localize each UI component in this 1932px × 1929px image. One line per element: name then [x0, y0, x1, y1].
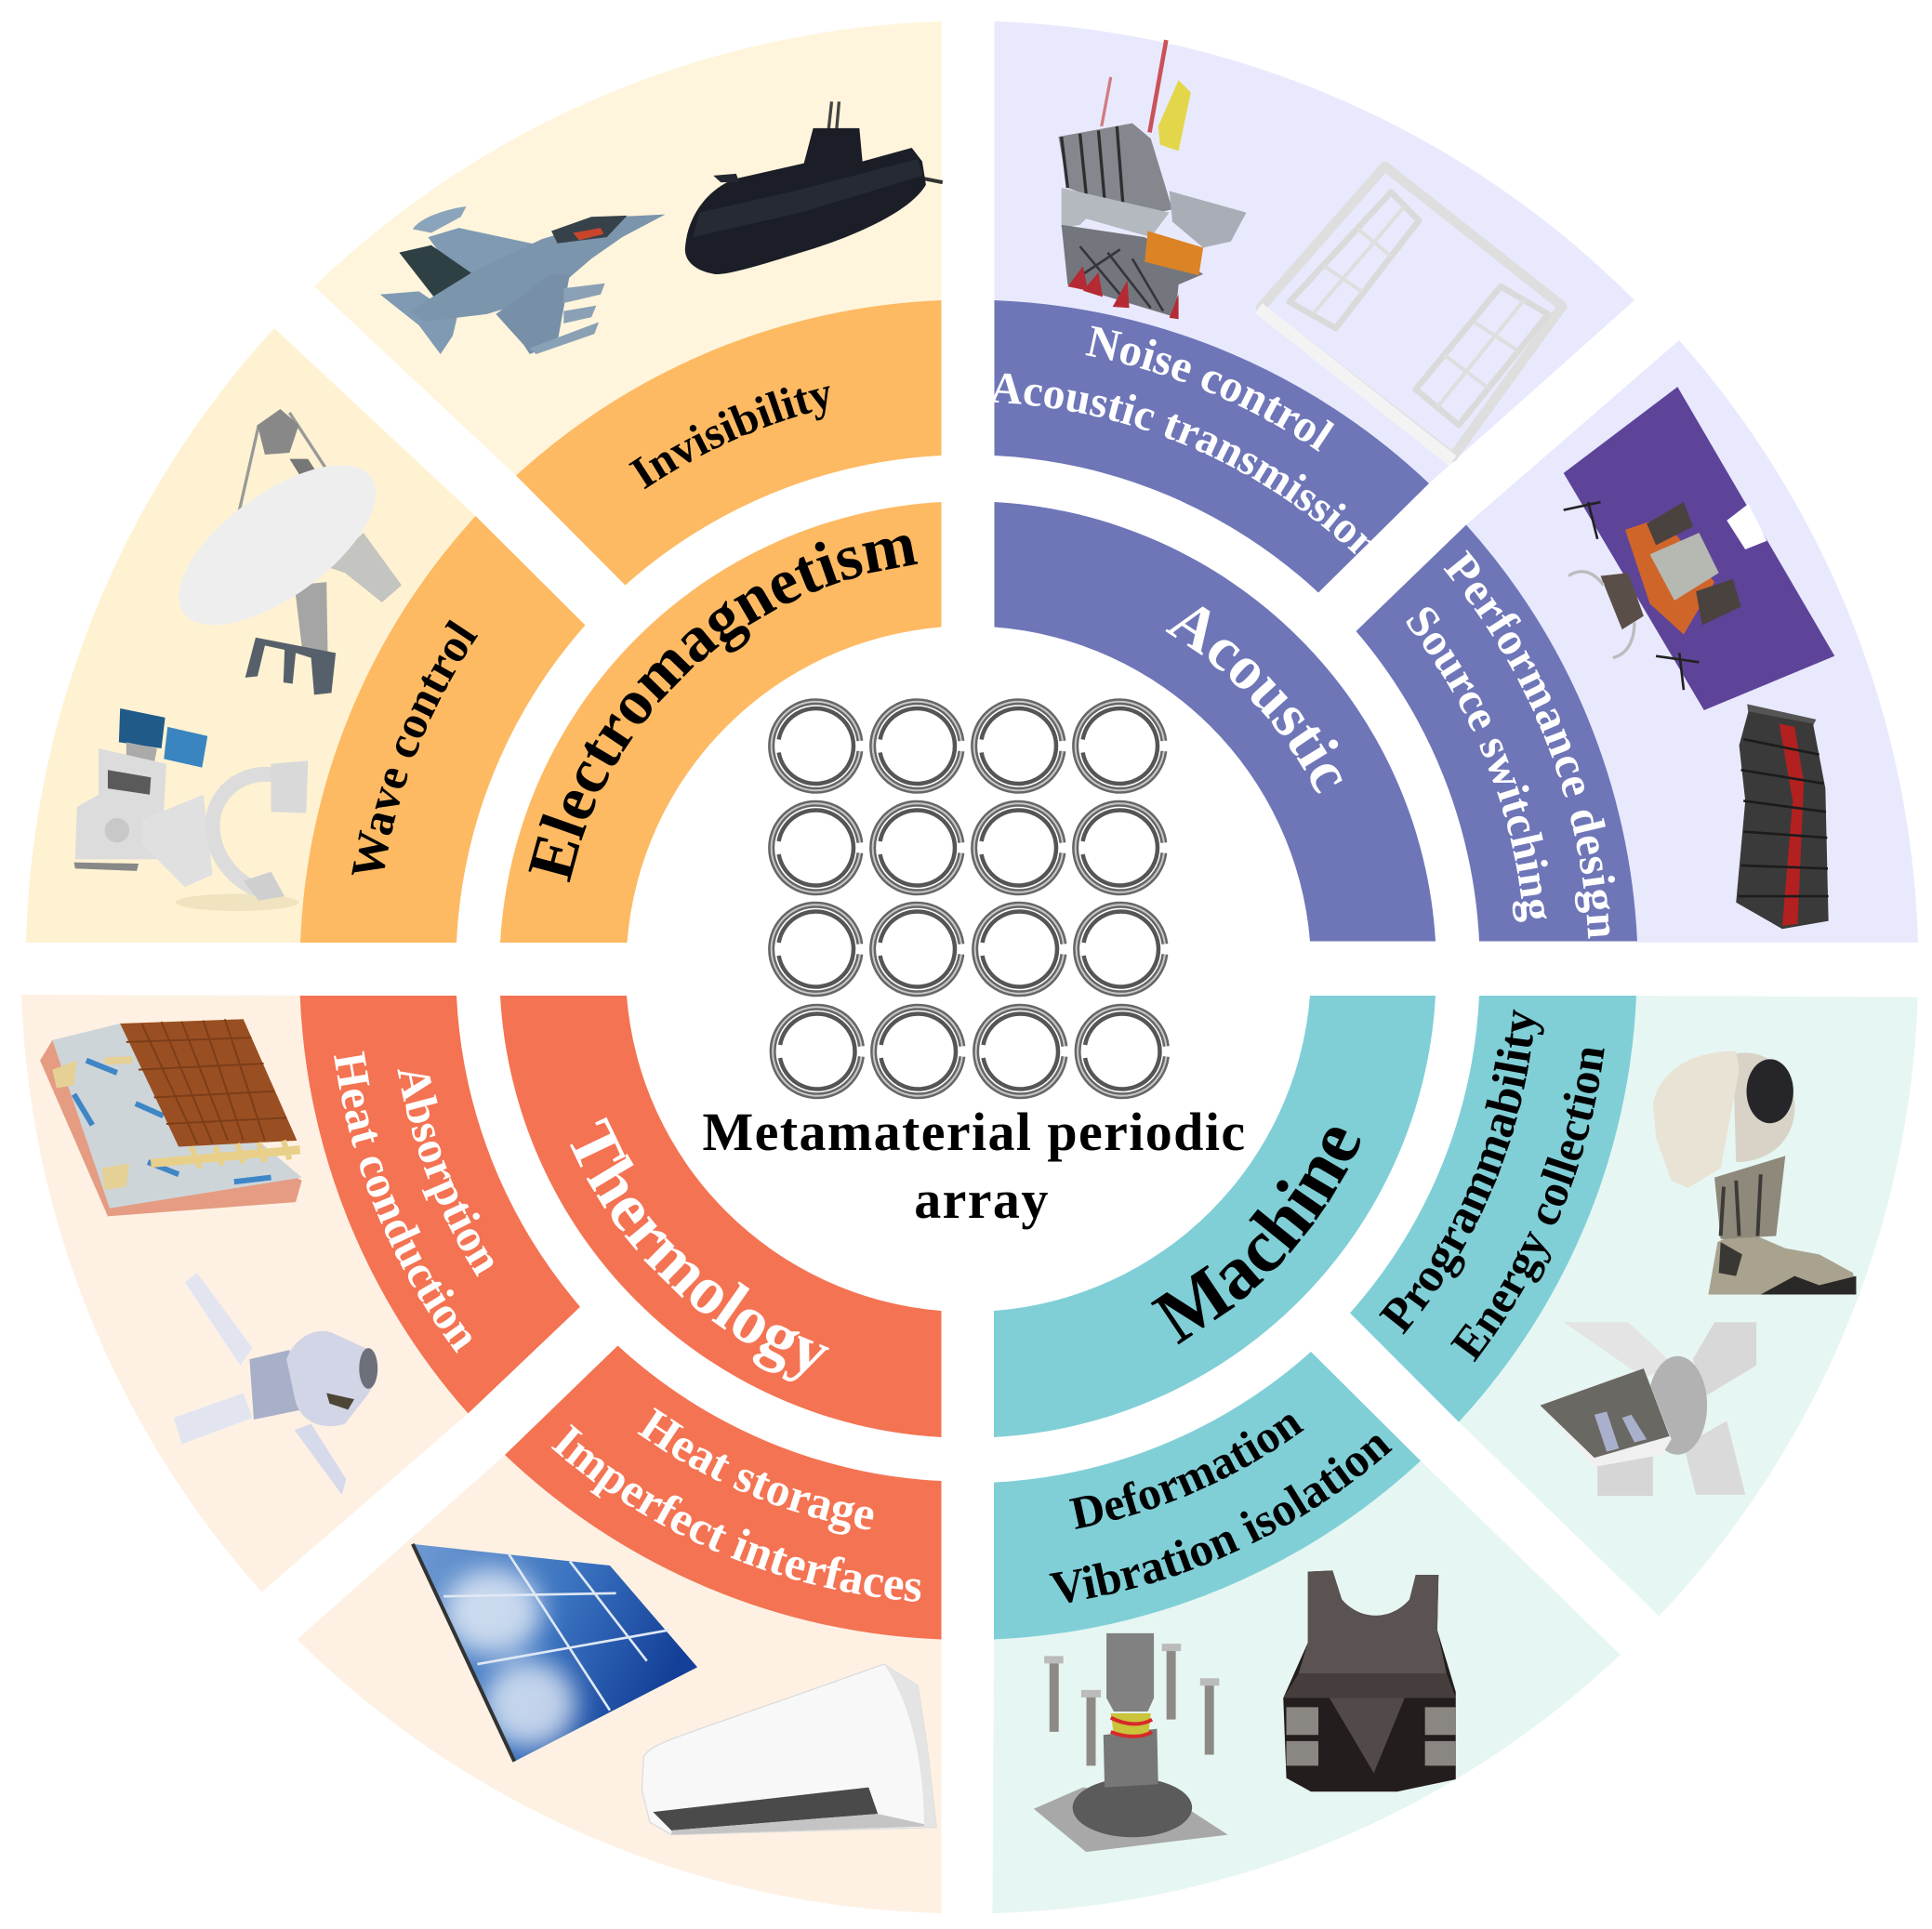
label: Deformation: Deformation — [1069, 1415, 1304, 1529]
label: Energy collection: Energy collection — [1450, 1049, 1605, 1363]
heading: Electromagnetism: Electromagnetism — [528, 535, 919, 883]
icon: C-arm medical scanner — [74, 708, 308, 911]
caption: Metamaterial periodic array: array — [914, 1169, 1050, 1230]
band: machine — [994, 996, 1436, 1437]
label: Acoustic transmission: Acoustic transmission — [995, 374, 1370, 554]
band: programmability — [1350, 996, 1636, 1422]
heading: Machine: Machine — [1151, 1128, 1360, 1344]
icon: fighter jet — [380, 206, 666, 354]
band: electromagnetism — [500, 502, 941, 943]
sector: noise control background — [995, 21, 1634, 483]
icon: offshore platform — [1058, 40, 1246, 319]
panel: electromagnetism quadrant — [26, 21, 943, 943]
sector: performance design background — [1466, 340, 1918, 943]
sector: wave control background — [26, 328, 476, 943]
band: performance design — [1356, 524, 1637, 941]
sector: invisibility background — [314, 21, 941, 476]
icon: humanoid robot — [1653, 1051, 1856, 1294]
label: Absorption: Absorption — [397, 1069, 493, 1277]
label: Performance design: Performance design — [1443, 549, 1615, 939]
sector: absorption background — [21, 995, 469, 1592]
sector: deformation background — [993, 1460, 1621, 1913]
label: Heat storage: Heat storage — [638, 1407, 874, 1535]
caption: Metamaterial periodic array: Metamaterial periodic — [702, 1102, 1247, 1162]
label: Noise control: Noise control — [1085, 325, 1335, 452]
label: Programmability: Programmability — [1379, 1010, 1544, 1335]
label: Wave control: Wave control — [351, 619, 478, 876]
icons: machine — [1034, 1051, 1856, 1852]
icons: electromagnetism — [74, 101, 943, 911]
label: Imperfect interfaces: Imperfect interfaces — [550, 1424, 920, 1602]
icons: acoustic — [1058, 40, 1834, 929]
chart: metamaterial ring array — [772, 702, 1166, 1096]
band: heat storage — [505, 1346, 941, 1640]
panel: acoustic quadrant — [995, 21, 1918, 943]
icon: bulletproof vest — [1283, 1570, 1456, 1791]
band: noise control — [995, 300, 1429, 593]
band: acoustic — [995, 502, 1436, 941]
icon: air conditioner — [642, 1664, 936, 1835]
band: thermology — [500, 996, 941, 1437]
label: Vibration isolation: Vibration isolation — [1049, 1435, 1393, 1603]
heading: Acoustic: Acoustic — [1166, 606, 1343, 794]
caption: Metamaterial periodic array — [702, 1102, 1247, 1230]
band: deformation — [994, 1352, 1421, 1640]
icon: open window — [1259, 166, 1562, 461]
icons: thermology — [40, 1019, 936, 1835]
icon: vibration isolator — [1034, 1633, 1228, 1852]
icon: submarine — [685, 101, 943, 274]
icon: satellite dish — [153, 409, 402, 694]
sector: heat storage background — [298, 1455, 941, 1913]
label: Heat conduction: Heat conduction — [334, 1050, 471, 1354]
icon: spacecraft — [174, 1273, 377, 1495]
panel: machine quadrant — [993, 996, 1918, 1913]
label: Source switching: Source switching — [1406, 607, 1548, 922]
label: Invisibility: Invisibility — [629, 386, 829, 489]
sector: programmability background — [1459, 996, 1918, 1616]
band: invisibility — [516, 300, 941, 586]
band: wave control — [300, 516, 586, 943]
icon: solar panel — [413, 1544, 697, 1762]
icon: wind turbine — [1541, 1322, 1756, 1496]
icon: recording studio — [1564, 387, 1834, 710]
heading: Thermology: Thermology — [570, 1117, 829, 1381]
icon: line array speaker — [1736, 704, 1829, 929]
band: absorption — [300, 996, 580, 1413]
panel: thermology quadrant — [21, 995, 941, 1913]
icon: roof insulation — [40, 1019, 302, 1216]
